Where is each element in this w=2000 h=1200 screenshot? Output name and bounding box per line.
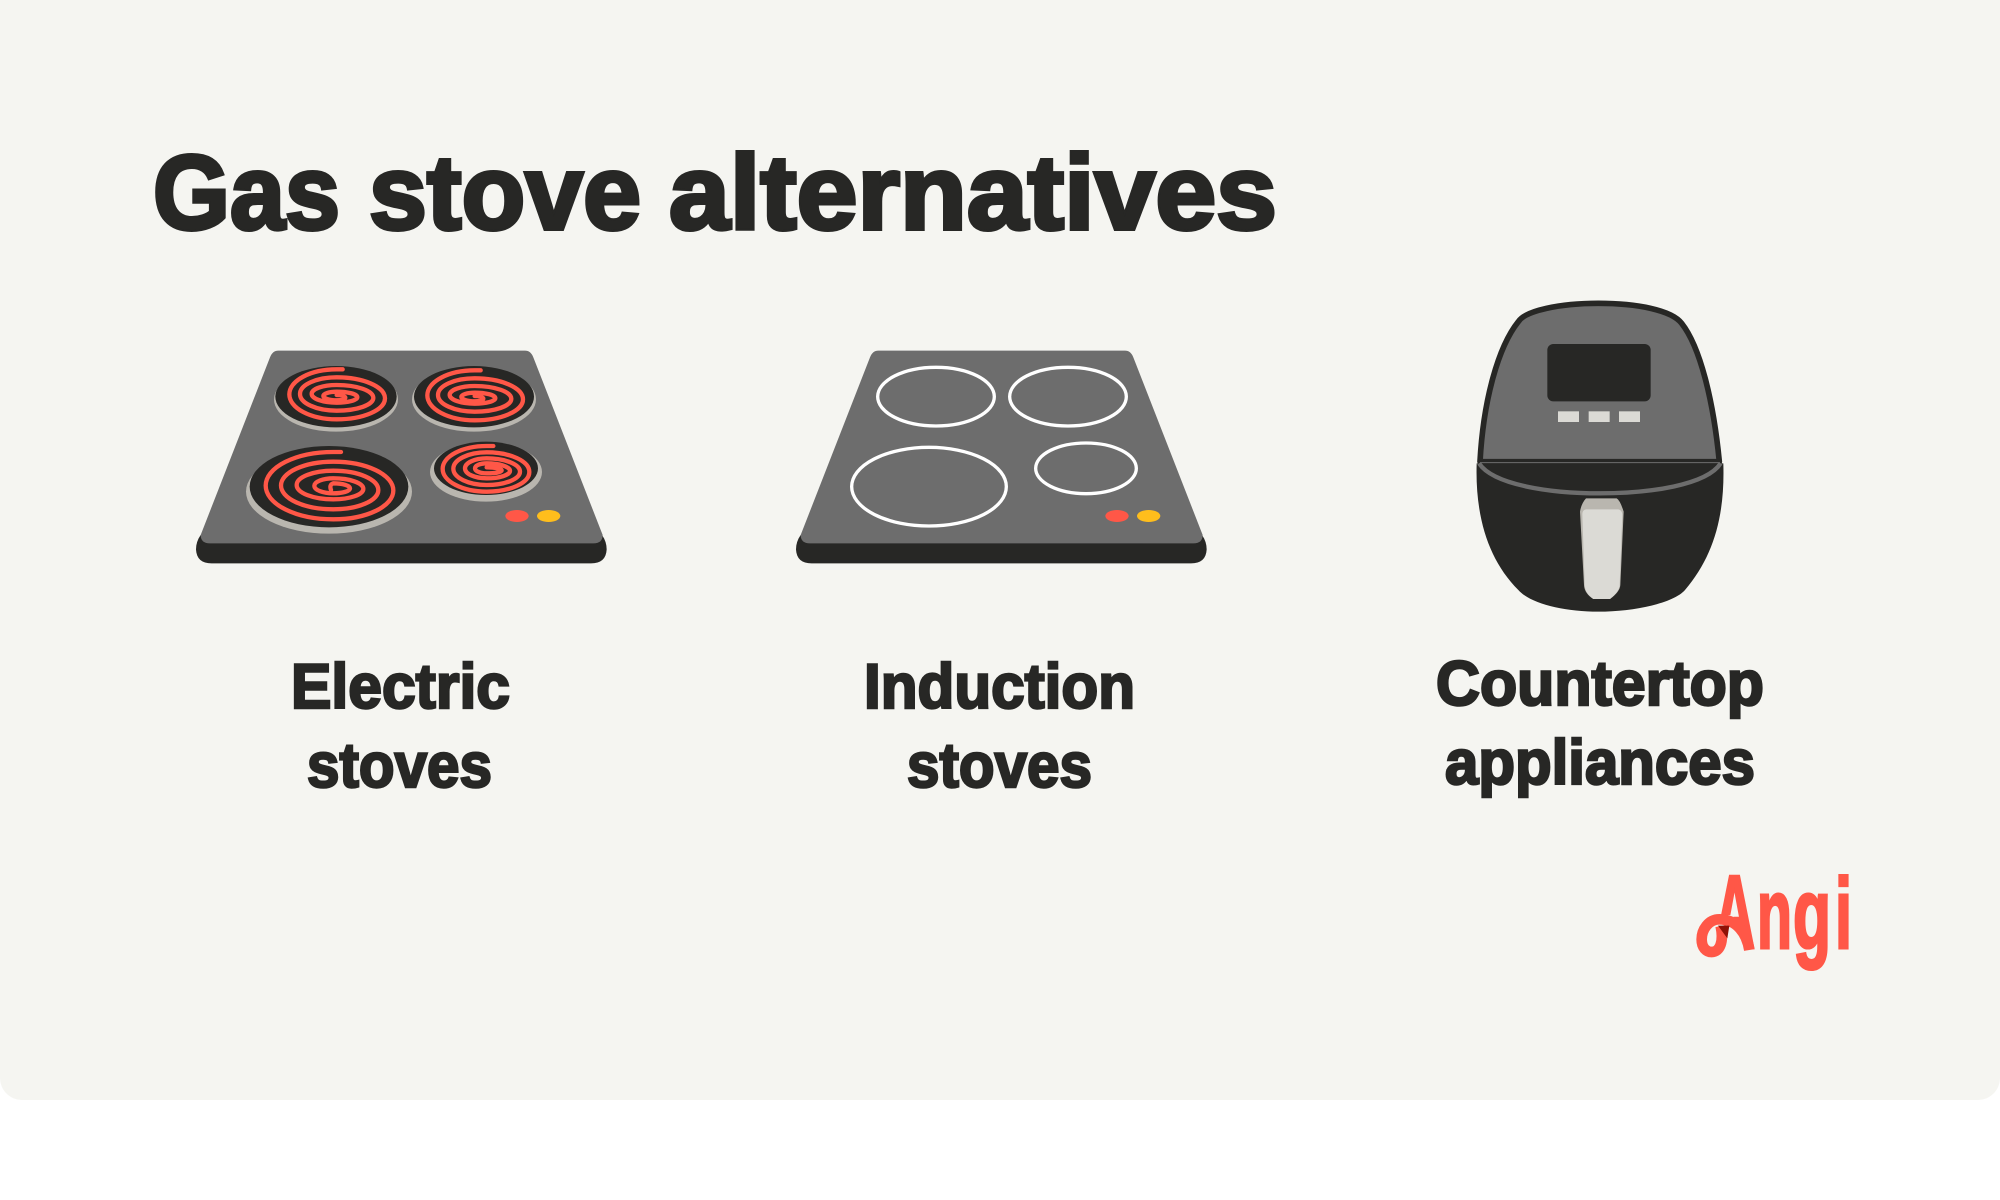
logo: Angi: n — [1757, 858, 1792, 970]
panel: induction stove — [796, 351, 1207, 801]
label: electric stoves — [291, 652, 510, 801]
label: induction stoves — [864, 652, 1135, 801]
label: induction stoves: Induction — [864, 652, 1135, 722]
label: countertop appliances: Countertop — [1436, 649, 1764, 719]
logo: Angi: g — [1793, 858, 1831, 970]
label: countertop appliances: appliances — [1445, 728, 1755, 798]
title: alternatives — [669, 134, 1277, 252]
panel: countertop appliances — [1436, 303, 1764, 798]
title: Gas — [153, 134, 340, 252]
logo: Angi: i — [1835, 858, 1852, 970]
label: electric stoves: Electric — [291, 652, 510, 722]
icon: induction stove — [796, 351, 1207, 563]
title — [153, 134, 1277, 252]
icon: air fryer — [1477, 303, 1723, 612]
icon: electric stove — [196, 351, 607, 563]
logo: Angi: A — [1714, 855, 1755, 971]
label: electric stoves: stoves — [307, 731, 492, 801]
logo: Angi — [1696, 874, 1849, 971]
label: induction stoves: stoves — [907, 731, 1092, 801]
panel: electric stove — [196, 351, 607, 801]
title: stove — [369, 134, 641, 252]
label: countertop appliances — [1436, 649, 1764, 798]
